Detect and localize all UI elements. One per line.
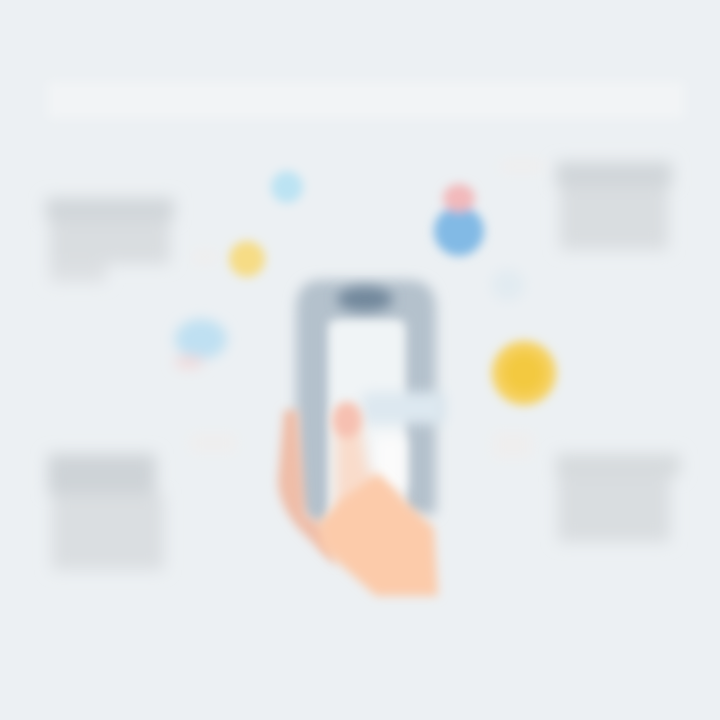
icon: faint blue marker	[491, 269, 525, 301]
text block: bottom right	[556, 454, 680, 542]
text block: top right	[556, 162, 672, 250]
white screen highlight	[374, 436, 406, 492]
title bar	[48, 82, 684, 118]
hand: fingertip	[333, 402, 361, 438]
text block: top left	[46, 198, 174, 282]
phone body	[296, 280, 436, 526]
text block: bottom left	[48, 454, 164, 570]
icon: large yellow coin	[492, 341, 556, 405]
phone screen	[330, 322, 402, 522]
decoration: faint connector marks	[190, 160, 544, 458]
phone notch	[337, 287, 393, 311]
hand: thumb and palm	[318, 474, 438, 596]
pale blue floating card	[362, 392, 446, 424]
icon: light blue circle	[271, 171, 303, 203]
icon: cloud and pink dot	[174, 319, 227, 369]
icon: blue and pink badge	[434, 184, 484, 256]
hand: finger	[336, 408, 400, 510]
hand: side of palm	[278, 410, 336, 566]
icon: small yellow circle	[229, 241, 265, 277]
hand	[278, 402, 438, 596]
phone	[296, 280, 446, 526]
